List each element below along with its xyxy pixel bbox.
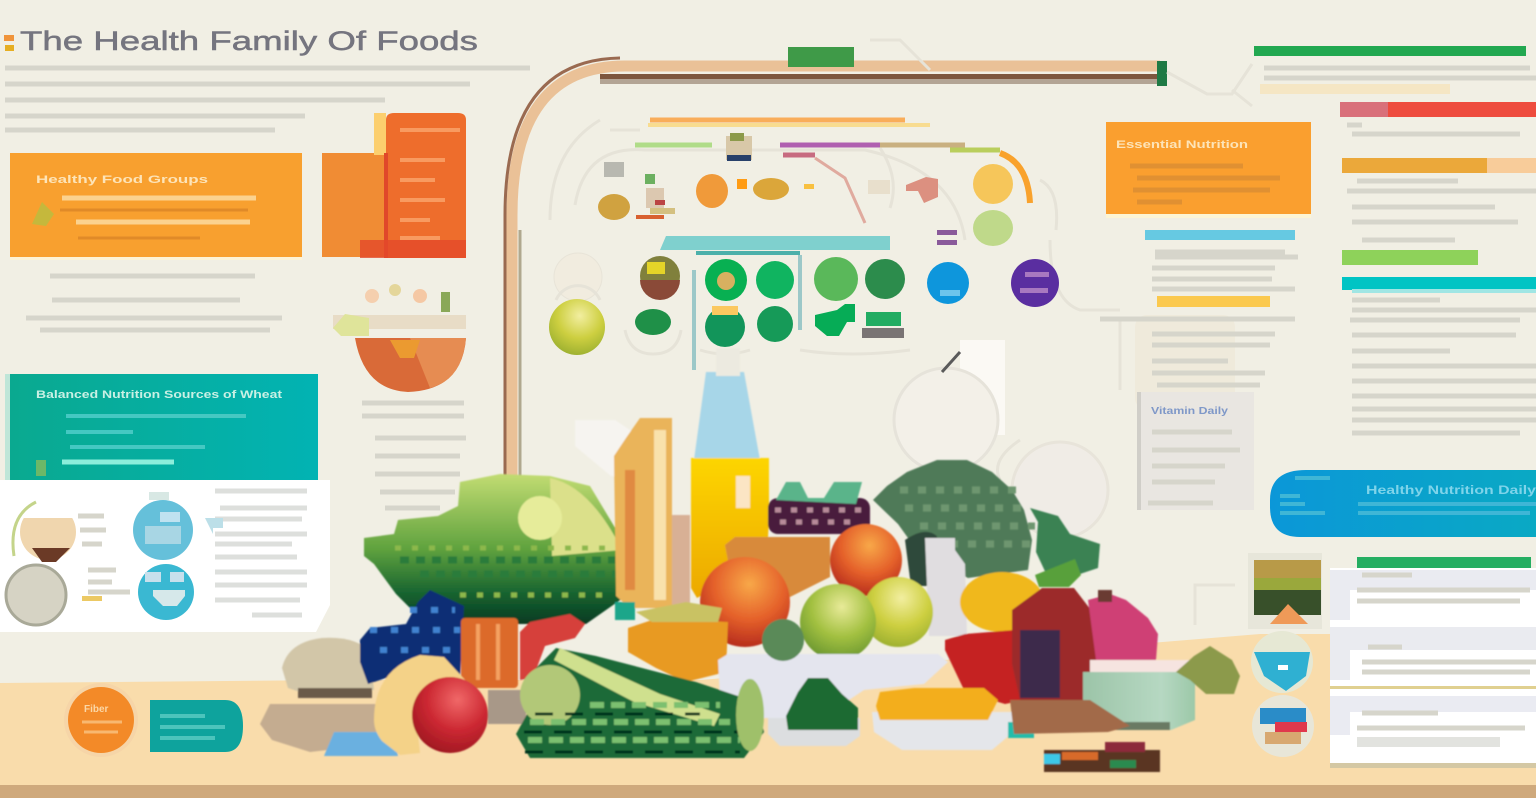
small label — [783, 152, 815, 158]
icon: title marker — [4, 35, 14, 51]
icon: beige — [868, 180, 890, 194]
pipe green clip — [788, 47, 854, 67]
teal heading: Balanced Nutrition Sources of Wheat — [36, 389, 282, 401]
icon: blueberries — [360, 590, 464, 684]
icon: blue circle bottom — [138, 564, 194, 620]
orange lines — [1130, 166, 1280, 202]
icon: glass bottle top — [575, 420, 645, 476]
beige block — [1135, 315, 1235, 410]
title: The Health Family Of Foods — [20, 26, 478, 56]
icon: cutting board — [260, 704, 380, 752]
panel: white nutrients — [0, 480, 330, 632]
icon: lettuce — [364, 474, 646, 624]
icon: grapes — [768, 498, 870, 534]
panel: white cards — [1330, 557, 1536, 768]
icon: yellow lemon — [960, 572, 1044, 632]
icon: white bowl — [718, 654, 948, 730]
teal lines — [66, 416, 246, 447]
icon: stone — [6, 565, 66, 625]
icon: bok choy — [516, 648, 764, 758]
panel: grey note card — [1137, 392, 1254, 510]
panel: cyan section — [1342, 277, 1536, 433]
icon: soft bubble — [1012, 442, 1108, 538]
pipe end cap — [1157, 61, 1167, 86]
icon: green apple — [549, 299, 605, 355]
icon: mixed — [636, 174, 675, 219]
cyan text — [1350, 300, 1536, 433]
icon: onion — [1088, 594, 1158, 660]
card text — [62, 198, 256, 222]
icon: blue plate — [324, 732, 398, 756]
connector lines — [550, 40, 1252, 625]
icon: broccoli bowl — [768, 678, 860, 746]
icon: teal tag — [615, 602, 635, 620]
icon: heart circle — [1251, 631, 1313, 693]
card heading: Healthy Food Groups — [36, 174, 208, 186]
icon: green tops — [776, 482, 862, 504]
icon: broccoli — [873, 460, 1100, 587]
label — [78, 516, 106, 544]
icon: olive — [1176, 646, 1240, 694]
icon: purple — [1011, 259, 1059, 307]
bar: green — [1342, 250, 1478, 265]
callout heading: Healthy Nutrition Daily — [1366, 483, 1536, 497]
book text — [400, 130, 460, 238]
icon: mint bowl — [1083, 660, 1195, 730]
cyan sub line — [1352, 289, 1536, 293]
panel: teal badge — [150, 700, 243, 752]
card text — [1357, 575, 1530, 601]
icon: green bowl with yellow — [705, 306, 745, 347]
yellow section text — [1100, 319, 1295, 396]
orange heading: Essential Nutrition — [1116, 139, 1248, 151]
white glass — [960, 340, 1005, 435]
panel: orange card left — [10, 153, 302, 260]
red text — [1347, 125, 1520, 134]
icon: carrot — [461, 618, 518, 688]
icon: green 3 — [814, 257, 858, 301]
label — [82, 570, 130, 601]
icon: spice tin — [1044, 742, 1160, 772]
icon: nut pile — [1010, 700, 1130, 734]
icon: orange fruit top — [830, 524, 902, 596]
icon: brown plate — [640, 256, 680, 300]
icon: small yellow — [804, 184, 814, 189]
icon: stem — [1098, 590, 1112, 602]
panel: red section — [1340, 102, 1536, 134]
icon: yellow bowl — [872, 688, 1018, 750]
icon: squash top — [725, 537, 830, 597]
icon: orange badge: Fiber — [84, 704, 109, 715]
panel: right orange card — [1106, 122, 1311, 218]
icon: tall glass bottle — [691, 348, 769, 598]
teal heading bar — [660, 236, 890, 250]
panel: teal — [5, 374, 318, 480]
card 3 text — [1357, 713, 1525, 728]
icon: plate — [726, 133, 752, 161]
icon: white bottle — [925, 538, 967, 636]
intro text — [5, 68, 530, 130]
icon: green 7 — [815, 304, 855, 336]
panel: right green heading — [1254, 46, 1536, 94]
panel: blue callout — [1270, 470, 1536, 537]
icon: blue clock — [927, 262, 969, 304]
section: yellow bar — [1100, 296, 1295, 410]
icon: green 4 — [865, 259, 905, 299]
icon: green tray — [862, 312, 904, 338]
category bars — [635, 142, 712, 148]
icon: grey square — [604, 162, 624, 177]
icon: metal bowl under — [488, 690, 526, 724]
callout text — [1280, 478, 1536, 513]
bubbles outline — [575, 148, 965, 240]
icon: bowl circle — [1252, 695, 1314, 757]
icon: green apple — [800, 584, 876, 660]
pipe arch — [505, 47, 1167, 482]
icon: green dish — [635, 309, 671, 335]
icon: bread — [598, 194, 630, 220]
icon: dark jar — [1012, 588, 1100, 700]
text block — [215, 491, 307, 615]
icon: grain bowl — [13, 501, 76, 562]
icon: orange fruit — [696, 174, 728, 208]
icon: small broccoli — [762, 619, 804, 661]
circles outline — [556, 286, 910, 354]
icon: yellow apple — [863, 577, 933, 647]
panel: central chart — [549, 120, 1059, 370]
orange section text — [1347, 181, 1536, 240]
blue section text — [1152, 252, 1298, 289]
icon: lime — [973, 210, 1013, 246]
bracket — [694, 255, 800, 370]
bowl caption — [362, 403, 466, 508]
card 1 green bar — [1357, 557, 1531, 568]
icon: banana — [374, 655, 466, 755]
icon: tomato — [520, 614, 585, 680]
icon: orange fruit — [700, 557, 790, 647]
green section text — [1264, 68, 1536, 78]
food pile — [260, 348, 1240, 772]
icon: bun — [753, 178, 789, 200]
icon: orange squash — [628, 602, 728, 682]
icon: landscape photo — [1248, 553, 1322, 629]
panel: orange book — [322, 113, 466, 258]
icon: red apple — [412, 677, 488, 753]
left caption text — [26, 276, 282, 330]
icon: orange badge — [64, 683, 138, 757]
icon: lemon — [973, 164, 1013, 204]
icon: speech bubble — [894, 368, 998, 472]
note text — [1148, 432, 1240, 503]
table — [0, 634, 1536, 798]
icon: card leaf — [32, 202, 54, 226]
teal sub bar — [696, 251, 800, 255]
icon: blue circle top — [133, 492, 193, 560]
icon: green 2 — [756, 261, 794, 299]
icon: green 1 — [705, 259, 747, 301]
note heading: Vitamin Daily — [1151, 406, 1229, 417]
section: blue bar — [1145, 230, 1298, 289]
icon: salad bowl — [333, 284, 466, 392]
icon: amber bottle — [614, 418, 690, 608]
card 2 text — [1362, 647, 1536, 672]
icon: orange square — [737, 179, 747, 189]
headline bars — [650, 118, 905, 122]
icon: teal cup — [1008, 722, 1034, 738]
icon: red pepper — [945, 630, 1025, 704]
icon: pink — [906, 177, 938, 203]
icon: stone cauliflower — [282, 638, 374, 698]
icon: spoon — [942, 352, 960, 372]
icon: flag — [937, 230, 957, 245]
icon: bubble — [554, 253, 602, 301]
icon: green 6 — [757, 306, 793, 342]
panel: orange section — [1342, 158, 1536, 240]
